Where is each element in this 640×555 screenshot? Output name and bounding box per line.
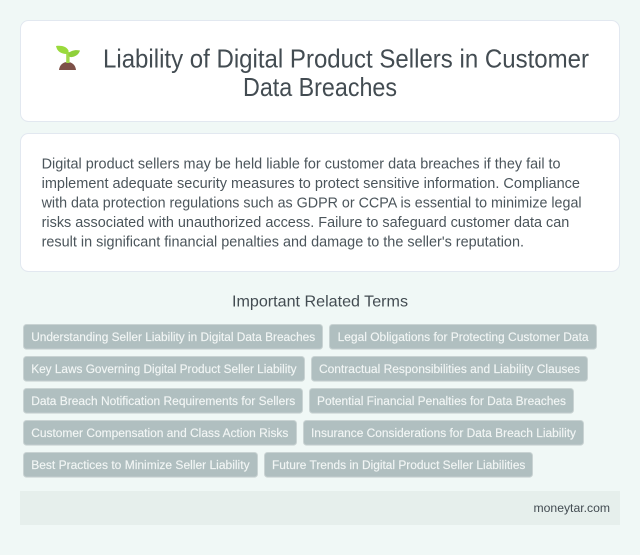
tag: Insurance Considerations for Data Breach Liability: [311, 426, 577, 440]
tag: [312, 356, 588, 381]
tag: [24, 420, 296, 445]
tag: Legal Obligations for Protecting Customer Data: [338, 330, 589, 344]
tag: Understanding Seller Liability in Digital Data Breaches: [31, 330, 315, 344]
tag: Key Laws Governing Digital Product Seller Liability: [31, 362, 297, 376]
tag: [24, 356, 304, 381]
tag: Customer Compensation and Class Action Risks: [31, 426, 288, 440]
panel: term tags: [24, 324, 596, 477]
tag: Future Trends in Digital Product Seller Liabilities: [272, 458, 525, 472]
tag: [330, 324, 596, 349]
title: [103, 46, 589, 102]
summary paragraph: risks associated with unauthorized access. Failure to safeguard customer data can: [42, 215, 569, 231]
summary paragraph: [41, 156, 582, 250]
tag: [264, 452, 532, 477]
footer bar: [20, 491, 620, 525]
tag: [24, 388, 302, 413]
summary paragraph: Digital product sellers may be held liable for customer data breaches if they fail to: [42, 156, 561, 172]
summary paragraph: result in significant financial penalties and damage to the seller's reputation.: [42, 234, 524, 250]
tag: Best Practices to Minimize Seller Liability: [31, 458, 250, 472]
panel: summary card: [20, 134, 620, 272]
title: Data Breaches: [243, 74, 397, 102]
icon: sprout: [56, 46, 80, 70]
tag: Contractual Responsibilities and Liability Clauses: [319, 362, 580, 376]
tag: [304, 420, 584, 445]
panel: title card: [20, 20, 620, 122]
summary paragraph: implement adequate security measures to protect sensitive information. Compliance: [42, 176, 580, 192]
heading: important related terms: Important Related Terms: [232, 294, 408, 310]
tag: Data Breach Notification Requirements for Sellers: [31, 394, 295, 408]
tag: [310, 388, 574, 413]
title: Liability of Digital Product Sellers in Customer: [103, 46, 589, 74]
footer source: moneytar.com: [534, 501, 610, 515]
tag: Potential Financial Penalties for Data Breaches: [317, 394, 566, 408]
tag: [24, 324, 322, 349]
tag: [24, 452, 258, 477]
summary paragraph: with data protection regulations such as GDPR or CCPA is essential to minimize legal: [41, 195, 582, 211]
